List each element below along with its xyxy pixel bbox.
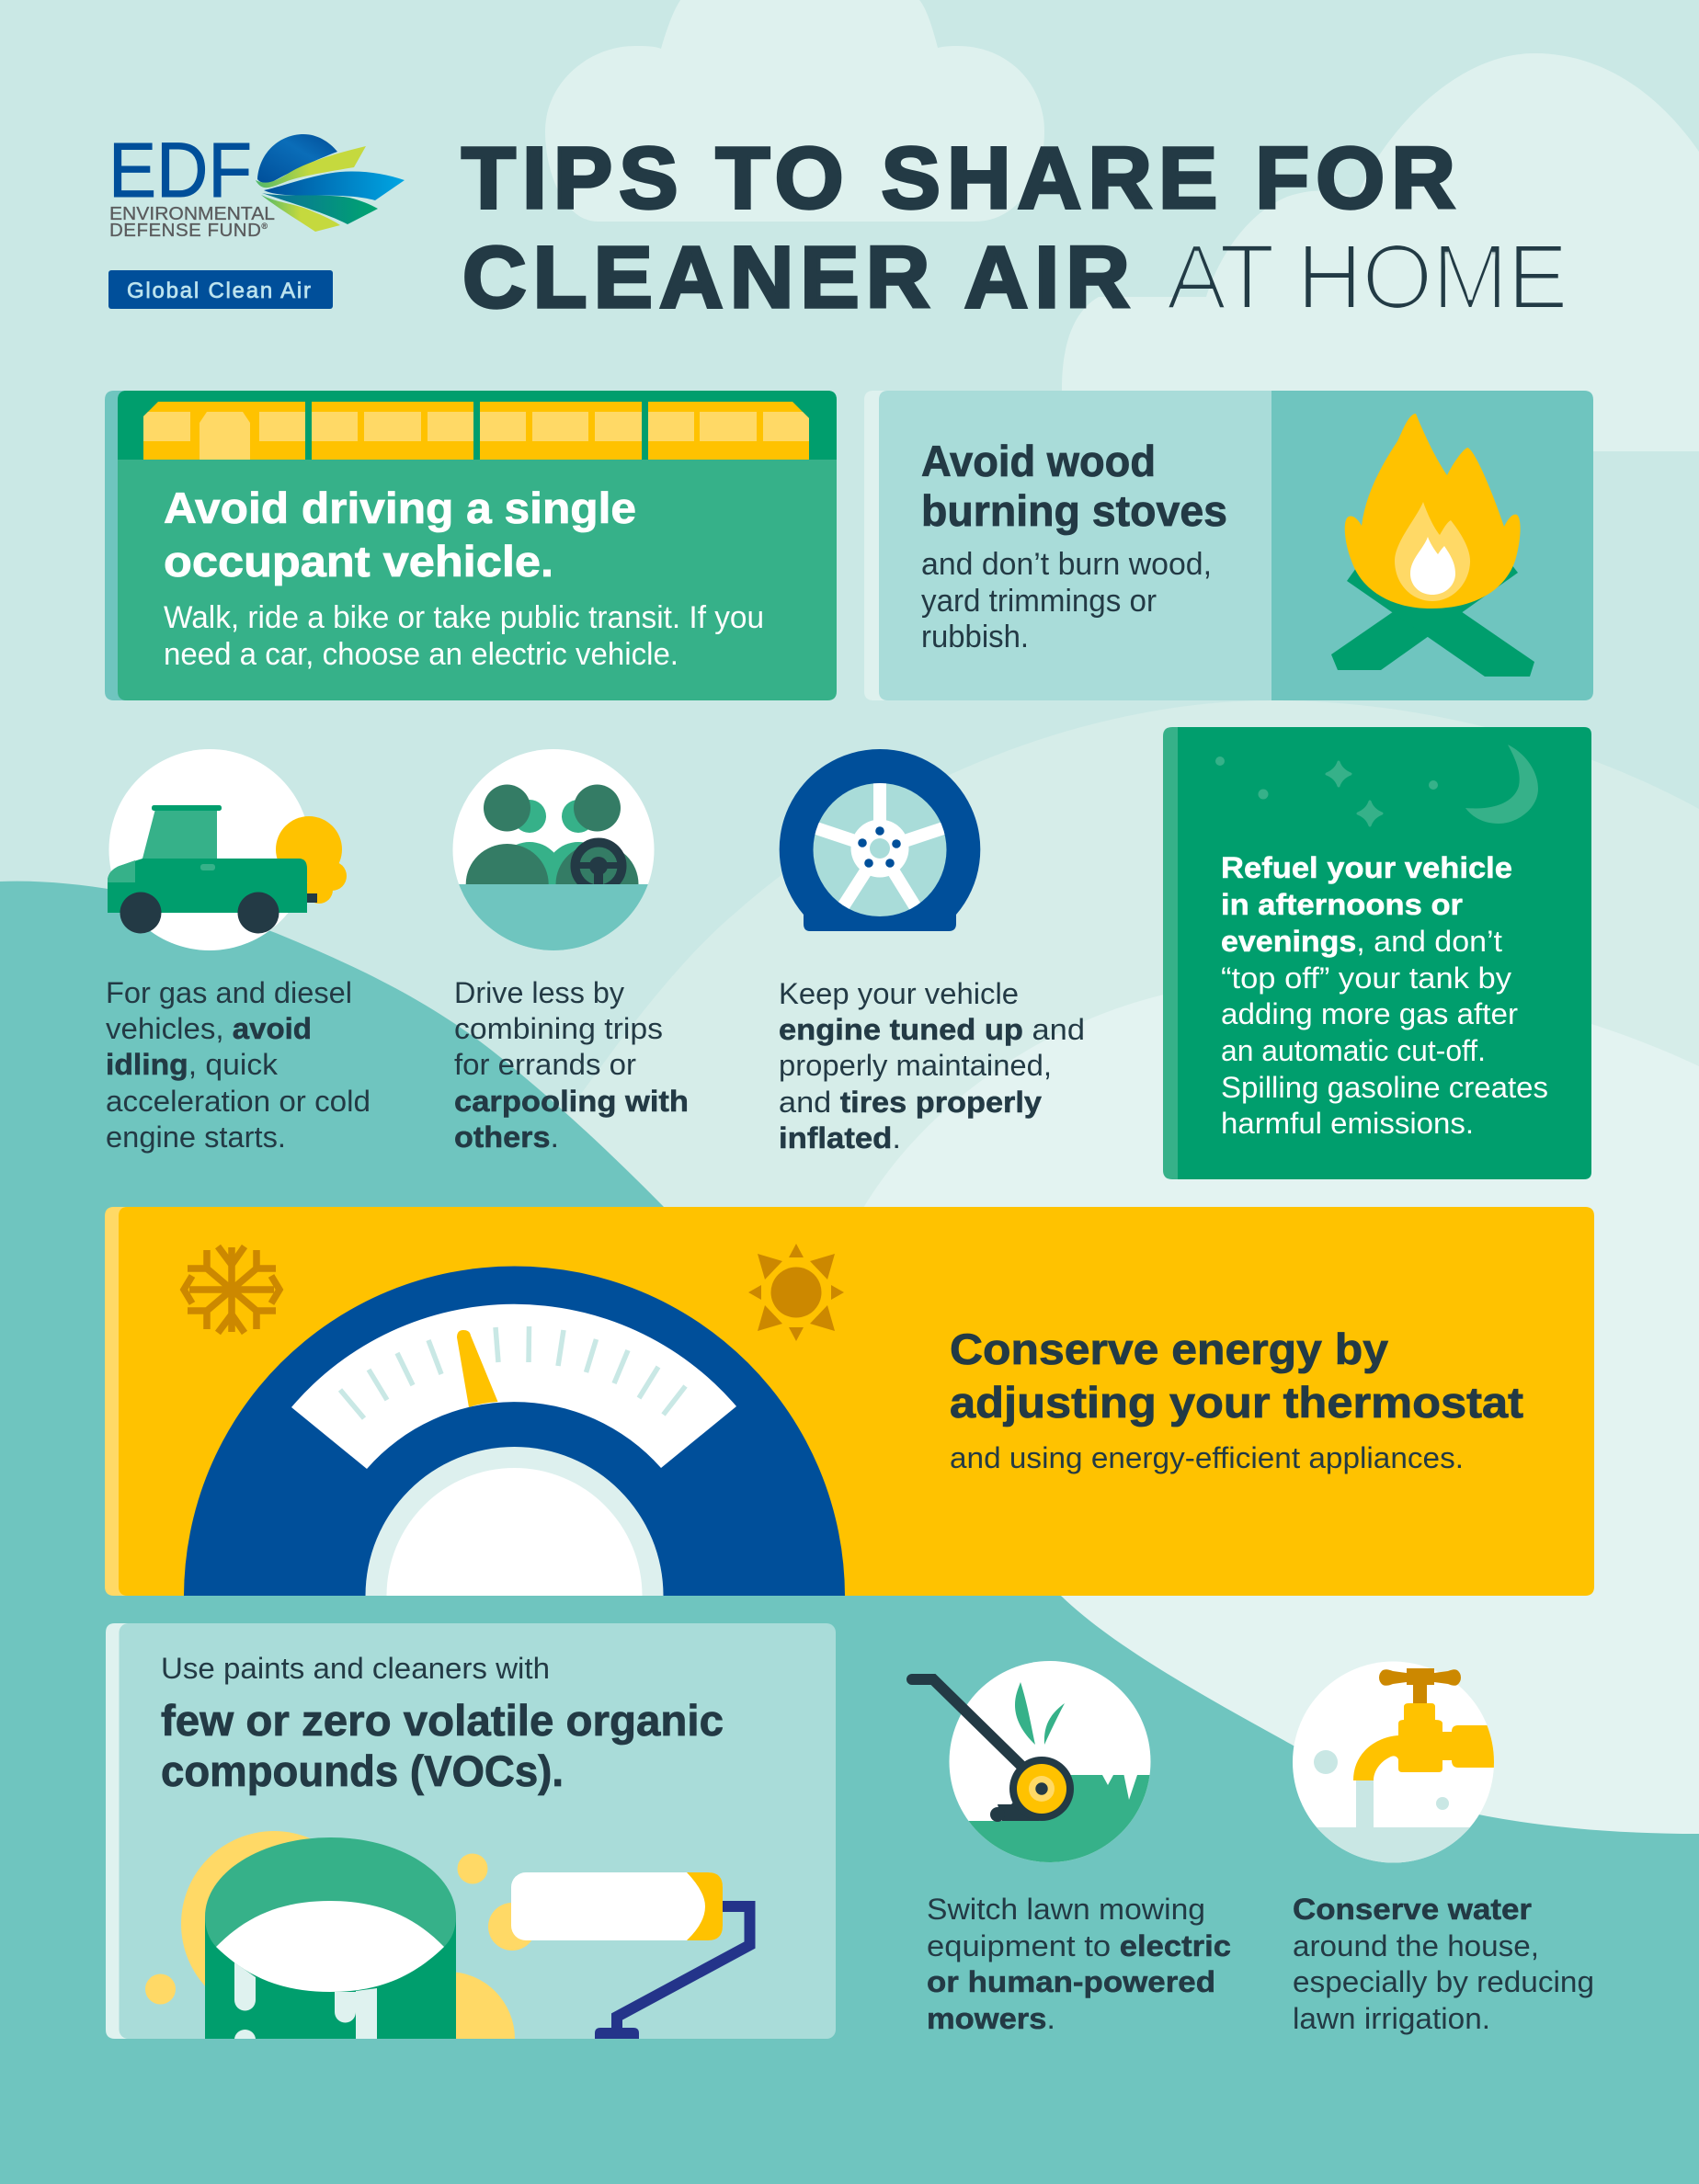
text: water <box>1293 1893 1594 2035</box>
heading: few or zero volatile organic <box>161 1696 724 1745</box>
text: mowers: Switch lawn mowing <box>927 1893 1205 1926</box>
icon: paint roller <box>511 1872 750 2039</box>
icon: snowflake <box>184 1246 279 1333</box>
panel: thermostat <box>105 1207 1594 1596</box>
text: refuel: “top off” your tank by <box>1221 961 1511 995</box>
text: refuel: adding more gas after <box>1221 997 1518 1030</box>
heading: compounds (VOCs). <box>161 1746 564 1795</box>
logo name: ENVIRONMENTAL <box>109 203 275 224</box>
text: idling: engine starts. <box>106 1120 286 1154</box>
text: refuel <box>1221 851 1548 1140</box>
text: idling <box>106 976 371 1154</box>
heading <box>164 483 636 586</box>
text: mowers <box>927 1893 1231 2035</box>
text: water: especially by reducing <box>1293 1965 1594 1998</box>
title: TIPS TO SHARE FOR <box>462 130 1462 227</box>
badge: Global Clean Air: Global Clean Air <box>127 279 311 303</box>
title: CLEANER AIR <box>462 229 1136 326</box>
icon: sun <box>748 1244 844 1341</box>
heading: Avoid driving a single <box>164 483 636 532</box>
text: tires: properly maintained, <box>779 1049 1052 1082</box>
icon: paint can <box>145 1831 531 2039</box>
text: idling: For gas and diesel <box>106 976 352 1009</box>
body text: and don’t burn wood, <box>921 547 1212 582</box>
heading <box>161 1696 724 1795</box>
text: carpooling: for errands or <box>454 1048 636 1081</box>
text: tires <box>779 977 1085 1155</box>
text: water: lawn irrigation. <box>1293 2002 1490 2035</box>
chart: thermostat gauge <box>184 1267 845 1596</box>
text: water: around the house, <box>1293 1929 1539 1962</box>
text: carpooling: combining trips <box>454 1012 663 1045</box>
logo wordmark: EDF <box>108 127 252 213</box>
text: idling: acceleration or cold <box>106 1085 371 1118</box>
text: tires: engine tuned up and <box>779 1013 1085 1046</box>
panel: avoid driving <box>105 391 837 700</box>
heading: burning stoves <box>921 486 1227 535</box>
text: idling: vehicles, avoid <box>106 1012 312 1045</box>
text: carpooling: Drive less by <box>454 976 624 1009</box>
text: water: Conserve water <box>1293 1893 1532 1926</box>
grass blades <box>1015 1682 1065 1745</box>
text: tires: inflated . <box>779 1121 901 1155</box>
body text: rubbish. <box>921 620 1029 654</box>
title <box>462 130 1568 329</box>
text: refuel: Spilling gasoline creates <box>1221 1071 1548 1104</box>
icon: lawn mower <box>912 1661 1158 1866</box>
panel: VOCs <box>106 1623 836 2039</box>
gauge needle <box>457 1330 498 1407</box>
text: mowers: mowers . <box>927 2002 1055 2035</box>
text: intro: Use paints and cleaners with <box>161 1652 550 1685</box>
text: carpooling: others. <box>454 1120 559 1154</box>
text: refuel: evenings , and don’t <box>1221 925 1502 958</box>
body text: and using energy-efficient appliances. <box>950 1441 1464 1474</box>
text: tires: Keep your vehicle <box>779 977 1019 1010</box>
text: mowers: or human-powered <box>927 1965 1215 1998</box>
text: idling: idling, quick <box>106 1048 279 1081</box>
heading: occupant vehicle. <box>164 537 553 586</box>
panel: refuel <box>1163 727 1591 1179</box>
heading: Conserve energy by <box>950 1325 1388 1373</box>
icon: carpool <box>452 749 655 950</box>
badge: Global Clean Air <box>108 270 333 309</box>
text: refuel: in afternoons or <box>1221 888 1463 921</box>
heading: Avoid wood <box>921 437 1156 485</box>
icon: tire <box>780 749 980 931</box>
panel: wood burning stoves <box>864 391 1593 700</box>
title: AT HOME <box>1166 226 1568 329</box>
faucet handle <box>1379 1668 1461 1703</box>
text: carpooling: carpooling with <box>454 1085 689 1118</box>
text: mowers: equipment to electric <box>927 1929 1231 1962</box>
heading <box>950 1325 1523 1427</box>
body text: Walk, ride a bike or take public transit. If you <box>164 600 764 635</box>
icon: faucet <box>1287 1662 1499 1869</box>
heading <box>921 437 1227 535</box>
body text: yard trimmings or <box>921 584 1157 619</box>
logo name <box>109 203 275 241</box>
logo name: ® <box>261 222 268 231</box>
icon: idling car <box>108 749 347 950</box>
logo name: DEFENSE FUND <box>109 220 261 241</box>
body text: need a car, choose an electric vehicle. <box>164 637 678 672</box>
text: refuel: Refuel your vehicle <box>1221 851 1512 884</box>
icon: campfire <box>1331 414 1534 677</box>
logo: EDF <box>108 127 405 241</box>
text: carpooling <box>454 976 689 1154</box>
text: refuel: an automatic cut-off. <box>1221 1034 1486 1067</box>
body text <box>921 547 1212 654</box>
text: tires: and tires properly <box>779 1086 1042 1119</box>
heading: adjusting your thermostat <box>950 1378 1523 1427</box>
icon: train <box>143 402 809 460</box>
logo mark <box>256 134 405 232</box>
icon: night sky <box>1215 745 1538 825</box>
body text <box>164 600 764 672</box>
text: refuel: harmful emissions. <box>1221 1107 1474 1140</box>
